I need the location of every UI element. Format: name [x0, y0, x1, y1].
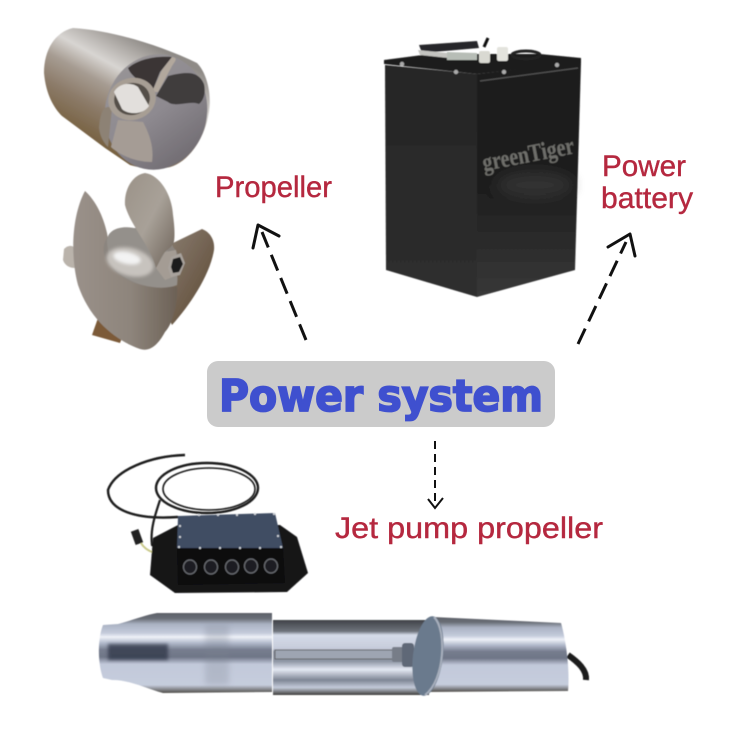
label: Power battery: battery — [601, 182, 693, 215]
label: Power battery — [601, 150, 693, 215]
icon: ducted propeller housing — [44, 28, 218, 179]
arrow: to jet pump propeller — [428, 441, 443, 508]
arrow: to power battery — [578, 234, 635, 344]
icon: jet pump propeller tube — [99, 613, 586, 698]
label: Propeller: Propeller — [215, 171, 332, 204]
icon: battery pack — [384, 38, 581, 297]
icon: propeller — [63, 173, 214, 350]
central heading panel: Power system: Power system — [219, 371, 543, 422]
battery brand mark: greenTiger — [480, 133, 576, 177]
arrow: to propeller — [253, 225, 306, 340]
icon: controller box with cables — [108, 455, 308, 593]
battery wiring on top — [418, 38, 540, 63]
housing inner blades — [99, 57, 205, 162]
label: Power battery: Power — [602, 150, 686, 183]
label: Jet pump propeller: Jet pump propeller — [335, 512, 603, 545]
